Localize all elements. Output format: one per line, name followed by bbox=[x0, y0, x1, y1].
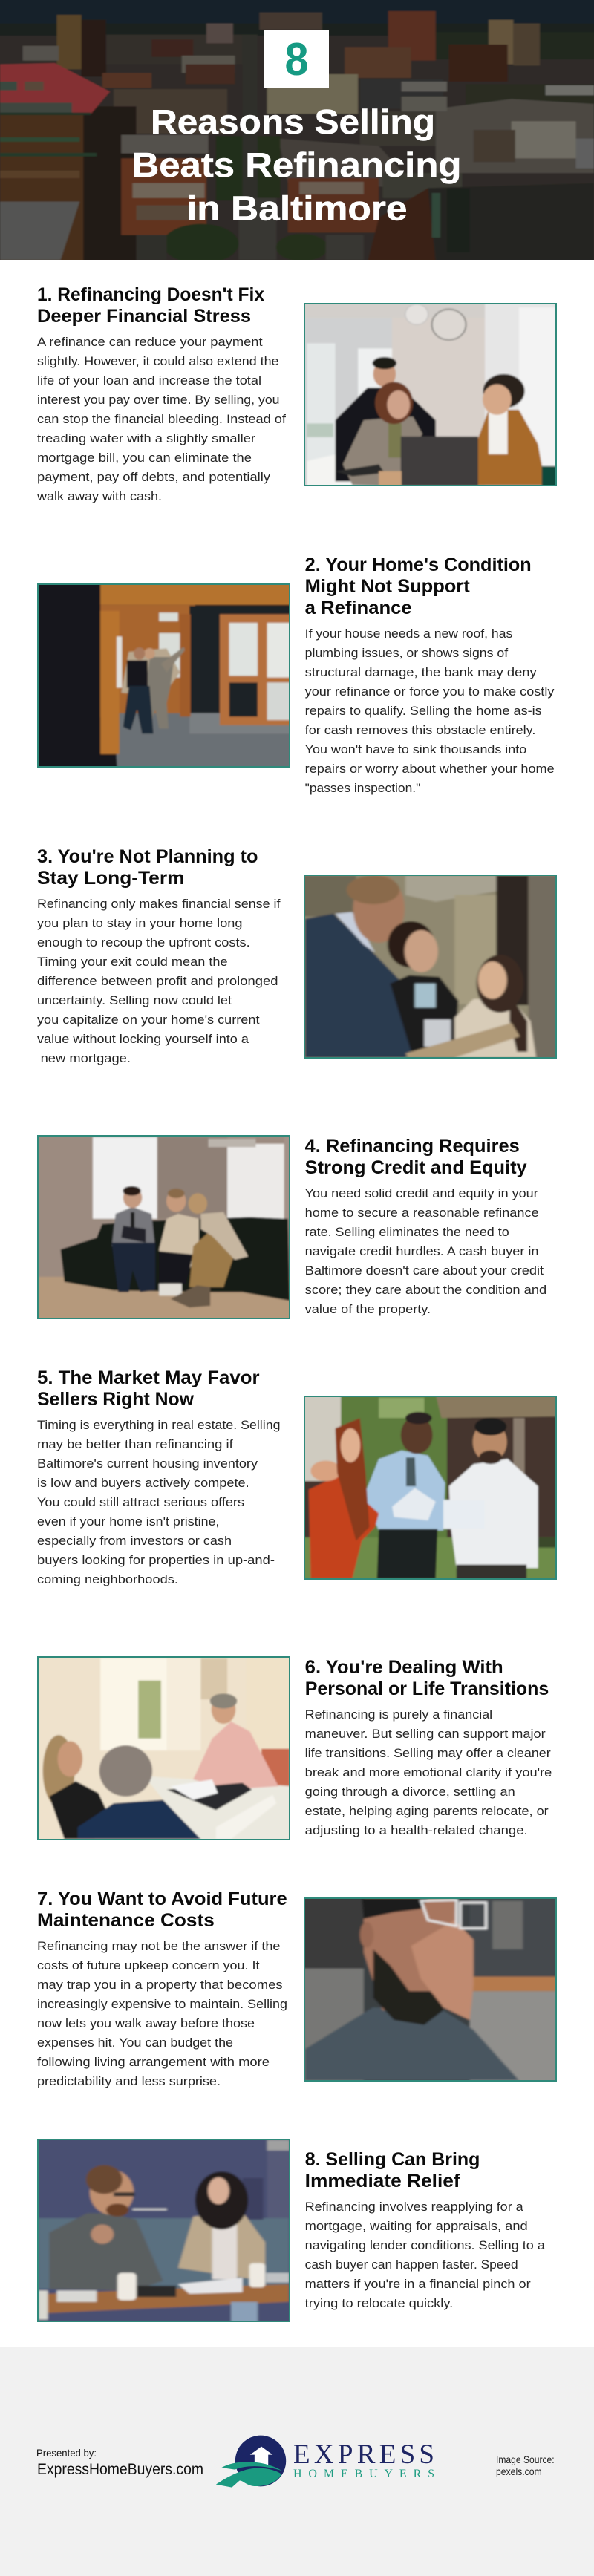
text block: reason 5: is low and buyers actively compete. bbox=[37, 1476, 249, 1490]
text block: reason 8: cash buyer can happen faster. Speed bbox=[305, 2258, 518, 2272]
text block: reason 4: rate. Selling eliminates the need to bbox=[305, 1225, 509, 1239]
text block: reason 2: for cash removes this obstacle entirely. bbox=[305, 723, 535, 737]
heading: reason 2: Might Not Support bbox=[305, 576, 470, 597]
heading: reason 5: 5. The Market May Favor bbox=[37, 1367, 260, 1388]
heading: reason 7 bbox=[37, 1889, 287, 1931]
text block: reason 5: may be better than refinancing if bbox=[37, 1437, 233, 1451]
heading: reason 8 bbox=[305, 2149, 480, 2191]
presented by: Presented by: bbox=[36, 2447, 97, 2459]
footer panel bbox=[0, 2347, 594, 2576]
text block: reason 2: If your house needs a new roof, has bbox=[305, 627, 512, 641]
text block: reason 1: can stop the financial bleeding. Instead of bbox=[37, 412, 286, 426]
text block: reason 5: Timing is everything in real estate. Selling bbox=[37, 1418, 281, 1432]
logo: Express HomeBuyers: EXPRESS bbox=[293, 2439, 434, 2470]
text block: reason 8 bbox=[305, 2200, 545, 2310]
photo: advisor meeting with a couple at a desk bbox=[34, 1653, 296, 1844]
text block: reason 6 bbox=[305, 1707, 552, 1837]
text block: reason 4: Baltimore doesn't care about your credit bbox=[305, 1264, 544, 1278]
panel: reason 6 bbox=[34, 1653, 552, 1844]
text block: reason 3: enough to recoup the upfront costs. bbox=[37, 935, 250, 949]
text block: reason 2: repairs or worry about whether your home bbox=[305, 762, 555, 776]
heading: reason 1: Deeper Financial Stress bbox=[37, 306, 251, 327]
text block: reason 6: going through a divorce, settling an bbox=[305, 1785, 515, 1799]
title: Beats Refinancing bbox=[132, 146, 462, 184]
logo: Express HomeBuyers: HOMEBUYERS bbox=[293, 2468, 434, 2480]
text block: reason 4: navigate credit hurdles. A cash buyer in bbox=[305, 1244, 539, 1258]
presented by: ExpressHomeBuyers.com bbox=[37, 2461, 203, 2478]
text block: reason 7: may trap you in a property that becomes bbox=[37, 1978, 283, 1992]
text block: reason 7 bbox=[37, 1939, 287, 2088]
panel: reason 4 bbox=[34, 1132, 546, 1323]
text block: reason 8: navigating lender conditions. Selling to a bbox=[305, 2238, 545, 2252]
text block: reason 3: uncertainty. Selling now could let bbox=[37, 993, 232, 1007]
text block: reason 5: You could still attract serious offers bbox=[37, 1495, 244, 1509]
text block: reason 2: You won't have to sink thousands into bbox=[305, 742, 526, 756]
heading: reason 3 bbox=[37, 846, 258, 889]
heading: reason 4: 4. Refinancing Requires bbox=[305, 1136, 520, 1157]
text block: reason 3: you capitalize on your home's current bbox=[37, 1013, 260, 1027]
image source credit bbox=[496, 2454, 555, 2477]
text block: reason 3: Refinancing only makes financial sense if bbox=[37, 897, 281, 911]
photo: agent with couple on a dark sofa bbox=[34, 1132, 296, 1323]
heading: reason 6: 6. You're Dealing With bbox=[305, 1657, 503, 1678]
text block: reason 3: new mortgage. bbox=[41, 1051, 131, 1065]
text block: reason 5: coming neighborhoods. bbox=[37, 1572, 178, 1586]
text block: reason 7: costs of future upkeep concern you. It bbox=[37, 1958, 260, 1972]
photo: stressed man holding his face bbox=[299, 1895, 564, 2085]
panel: reason 3 bbox=[37, 846, 564, 1065]
text block: reason 4 bbox=[305, 1186, 546, 1316]
heading: reason 1 bbox=[37, 284, 264, 327]
text block: reason 8: trying to relocate quickly. bbox=[305, 2296, 453, 2310]
text block: reason 6: break and more emotional clarity if you're bbox=[305, 1765, 552, 1779]
text block: reason 6: Refinancing is purely a financial bbox=[305, 1707, 492, 1722]
title bbox=[132, 102, 462, 227]
title: in Baltimore bbox=[186, 189, 407, 227]
text block: reason 3: you plan to stay in your home long bbox=[37, 916, 242, 930]
number badge bbox=[264, 30, 329, 88]
text block: reason 4: home to secure a reasonable refinance bbox=[305, 1206, 539, 1220]
text block: reason 1: slightly. However, it could also extend the bbox=[37, 354, 279, 368]
text block: reason 2: your refinance or force you to make costly bbox=[305, 684, 555, 699]
text block: reason 7: following living arrangement with more bbox=[37, 2055, 270, 2069]
heading: reason 7: 7. You Want to Avoid Future bbox=[37, 1889, 287, 1909]
heading: reason 2: 2. Your Home's Condition bbox=[305, 555, 532, 575]
image source credit: pexels.com bbox=[496, 2465, 542, 2477]
heading: reason 2 bbox=[305, 555, 532, 618]
heading: reason 7: Maintenance Costs bbox=[37, 1910, 215, 1931]
text block: reason 6: life transitions. Selling may offer a cleaner bbox=[305, 1746, 551, 1760]
text block: reason 5: buyers looking for properties in up-and- bbox=[37, 1553, 275, 1567]
header: Baltimore skyline banner bbox=[0, 0, 594, 265]
text block: reason 7: now lets you walk away before those bbox=[37, 2016, 255, 2030]
text block: reason 7: Refinancing may not be the answer if the bbox=[37, 1939, 281, 1953]
heading: reason 8: 8. Selling Can Bring bbox=[305, 2149, 480, 2170]
text block: reason 7: expenses hit. You can budget the bbox=[37, 2036, 233, 2050]
text block: reason 8: matters if you're in a financial pinch or bbox=[305, 2277, 531, 2291]
text block: reason 5: even if your home isn't pristine, bbox=[37, 1514, 219, 1529]
panel: reason 8 bbox=[34, 2136, 545, 2326]
text block: reason 5: especially from investors or cash bbox=[37, 1534, 232, 1548]
text block: reason 8: Refinancing involves reapplying for a bbox=[305, 2200, 523, 2214]
heading: reason 4: Strong Credit and Equity bbox=[305, 1157, 527, 1178]
text block: reason 1: interest you pay over time. By selling, you bbox=[37, 393, 279, 407]
text block: reason 7: predictability and less surprise. bbox=[37, 2074, 221, 2088]
heading: reason 6 bbox=[305, 1657, 549, 1699]
text block: reason 3 bbox=[37, 897, 281, 1065]
heading: reason 5 bbox=[37, 1367, 260, 1410]
text block: reason 4: score; they care about the condition and bbox=[305, 1283, 546, 1297]
heading: reason 1: 1. Refinancing Doesn't Fix bbox=[37, 284, 264, 305]
text block: reason 1: payment, pay off debts, and potentially bbox=[37, 470, 271, 484]
text block: reason 1: mortgage bill, you can eliminate the bbox=[37, 451, 252, 465]
photo: couple meeting an agent at a laptop bbox=[299, 298, 564, 491]
photo: couple exhaling at a table with bills bbox=[34, 2136, 296, 2326]
heading: reason 4 bbox=[305, 1136, 527, 1178]
text block: reason 5 bbox=[37, 1418, 281, 1586]
heading: reason 3: 3. You're Not Planning to bbox=[37, 846, 258, 867]
image source credit: Image Source: bbox=[496, 2454, 555, 2465]
text block: reason 6: adjusting to a health-related change. bbox=[305, 1823, 528, 1837]
photo: agent talking with a couple bbox=[299, 871, 564, 1062]
photo: renovation walkthrough in wood interior bbox=[34, 581, 296, 771]
panel: reason 7 bbox=[37, 1889, 564, 2088]
presented by bbox=[36, 2447, 203, 2478]
text block: reason 6: estate, helping aging parents relocate, or bbox=[305, 1804, 549, 1818]
text block: reason 1 bbox=[36, 335, 286, 503]
text block: reason 2: plumbing issues, or shows signs of bbox=[305, 646, 508, 660]
text block: reason 1: life of your loan and increase the total bbox=[37, 373, 261, 388]
text block: reason 3: Timing your exit could mean the bbox=[37, 955, 228, 969]
text block: reason 4: You need solid credit and equity in your bbox=[305, 1186, 538, 1200]
text block: reason 2: repairs to qualify. Selling the home as-is bbox=[305, 704, 542, 718]
text block: reason 8: mortgage, waiting for appraisals, and bbox=[305, 2219, 528, 2233]
text block: reason 2: "passes inspection." bbox=[305, 781, 420, 795]
text block: reason 1: walk away with cash. bbox=[36, 489, 162, 503]
panel: reason 1 bbox=[36, 284, 564, 503]
heading: reason 8: Immediate Relief bbox=[305, 2171, 460, 2191]
text block: reason 7: increasingly expensive to maintain. Selling bbox=[37, 1997, 287, 2011]
text block: reason 4: value of the property. bbox=[305, 1302, 431, 1316]
heading: reason 6: Personal or Life Transitions bbox=[305, 1678, 549, 1699]
number badge: 8 bbox=[285, 34, 309, 85]
panel: reason 2 bbox=[34, 555, 555, 795]
heading: reason 2: a Refinance bbox=[305, 598, 412, 618]
title: Reasons Selling bbox=[151, 102, 435, 141]
text block: reason 1: A refinance can reduce your payment bbox=[37, 335, 263, 349]
text block: reason 2 bbox=[305, 627, 555, 795]
photo: three people reviewing papers outdoors bbox=[299, 1393, 564, 1583]
heading: reason 3: Stay Long-Term bbox=[37, 868, 184, 889]
logo: Express HomeBuyers bbox=[216, 2436, 434, 2488]
panel: reason 5 bbox=[37, 1367, 564, 1586]
text block: reason 2: structural damage, the bank may deny bbox=[305, 665, 537, 679]
text block: reason 1: treading water with a slightly smaller bbox=[37, 431, 255, 445]
text block: reason 5: Baltimore's current housing inventory bbox=[37, 1457, 258, 1471]
text block: reason 3: value without locking yourself into a bbox=[37, 1032, 249, 1046]
text block: reason 6: maneuver. But selling can support major bbox=[305, 1727, 546, 1741]
text block: reason 3: difference between profit and prolonged bbox=[37, 974, 278, 988]
heading: reason 5: Sellers Right Now bbox=[37, 1389, 195, 1410]
